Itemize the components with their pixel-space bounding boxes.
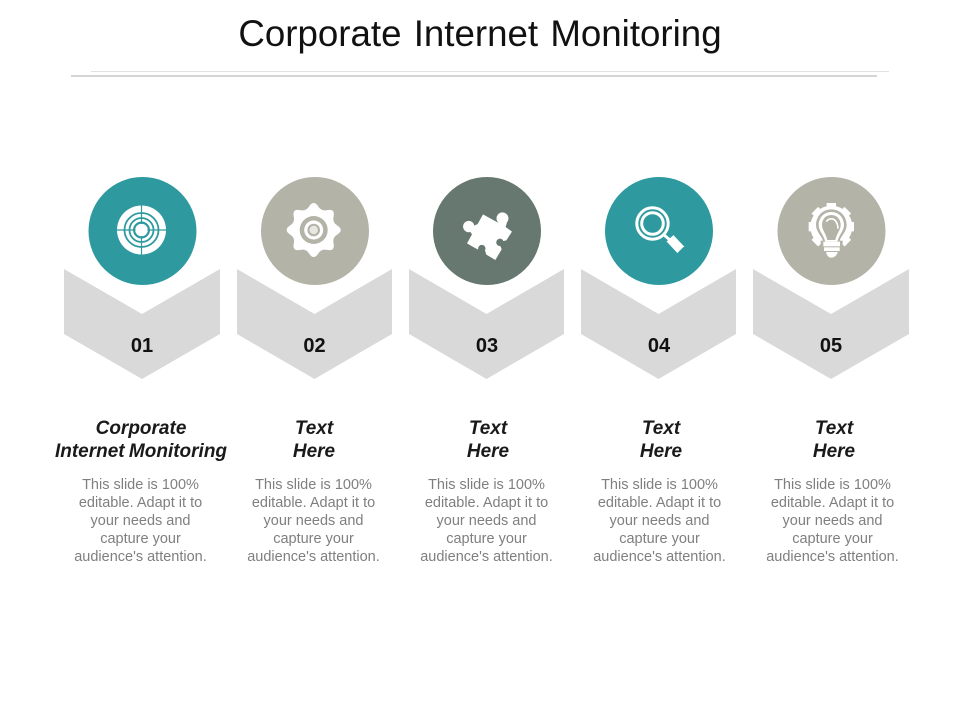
text block 04: capture your — [619, 531, 700, 547]
text block 02 — [247, 477, 380, 565]
text block 04: This slide is 100% — [601, 477, 718, 493]
heading 02: Text — [295, 418, 333, 439]
heading 04: Text — [642, 418, 680, 439]
text block 02: capture your — [273, 531, 354, 547]
heading 01 — [55, 418, 227, 462]
icon: puzzle piece in slate circle — [433, 177, 541, 285]
text block 04: audience's attention. — [593, 549, 726, 565]
text block 03 — [420, 477, 553, 565]
text block 05: This slide is 100% — [774, 477, 891, 493]
text block 01: audience's attention. — [74, 549, 207, 565]
text block 03: capture your — [446, 531, 527, 547]
text block 04: editable. Adapt it to — [598, 495, 721, 511]
chevron 04 — [581, 269, 736, 379]
text block 05: your needs and — [783, 513, 882, 529]
chevron 02 — [237, 269, 392, 379]
heading 01: Corporate — [96, 418, 186, 439]
text block 01 — [74, 477, 207, 565]
icon: gear in taupe circle — [261, 177, 369, 285]
text block 03: This slide is 100% — [428, 477, 545, 493]
heading 04: Here — [640, 441, 682, 462]
chevron 04: 04 — [648, 335, 671, 357]
heading 04 — [640, 418, 682, 462]
heading 03: Text — [469, 418, 507, 439]
heading 02: Here — [293, 441, 335, 462]
title: Corporate Internet Monitoring — [238, 13, 722, 54]
chevron 02: 02 — [303, 335, 326, 357]
chevron 03: 03 — [476, 335, 498, 357]
icon: magnifying glass in teal circle — [605, 177, 713, 285]
icon: target in teal circle — [88, 177, 196, 285]
chevron 01: 01 — [131, 335, 153, 357]
text block 04: your needs and — [610, 513, 709, 529]
text block 02: audience's attention. — [247, 549, 380, 565]
heading 05: Text — [815, 418, 853, 439]
heading 03 — [467, 418, 509, 462]
text block 01: your needs and — [91, 513, 190, 529]
chevron 01 — [64, 269, 220, 379]
icon: lightbulb with gear in taupe circle — [778, 177, 886, 285]
text block 03: audience's attention. — [420, 549, 553, 565]
heading 05: Here — [813, 441, 855, 462]
text block 05 — [766, 477, 899, 565]
text block 05: editable. Adapt it to — [771, 495, 894, 511]
heading 03: Here — [467, 441, 509, 462]
text block 03: editable. Adapt it to — [425, 495, 548, 511]
heading 02 — [293, 418, 335, 462]
text block 05: capture your — [792, 531, 873, 547]
text block 01: This slide is 100% — [82, 477, 199, 493]
chevron 05: 05 — [820, 335, 842, 357]
text block 01: capture your — [100, 531, 181, 547]
heading 01: Internet Monitoring — [55, 441, 227, 462]
text block 04 — [593, 477, 726, 565]
chevron 05 — [753, 269, 909, 379]
text block 02: editable. Adapt it to — [252, 495, 375, 511]
text block 05: audience's attention. — [766, 549, 899, 565]
text block 01: editable. Adapt it to — [79, 495, 202, 511]
text block 02: This slide is 100% — [255, 477, 372, 493]
text block 02: your needs and — [264, 513, 363, 529]
text block 03: your needs and — [437, 513, 536, 529]
chevron 03 — [409, 269, 564, 379]
heading 05 — [813, 418, 855, 462]
